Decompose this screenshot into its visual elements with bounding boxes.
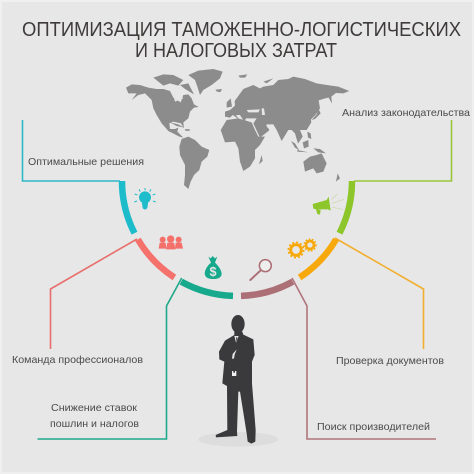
panel: manufacturer search (241, 260, 436, 439)
connector: coral (50, 239, 137, 349)
arc: mauve (241, 282, 293, 296)
panel: lower rates (38, 256, 233, 439)
icon: money bag (205, 256, 222, 279)
panel: team of professionals (12, 235, 183, 366)
icon: magnifier (250, 260, 271, 280)
connector: mauve (292, 278, 436, 439)
map: Russia and northern Asia (235, 77, 349, 120)
figure: businessman (198, 315, 278, 447)
icon: gears (288, 239, 316, 258)
title (22, 19, 461, 62)
world map (126, 69, 349, 189)
connector: orange (335, 238, 424, 349)
arc: coral (138, 239, 174, 278)
label: lower rates: пошлин и налогов (50, 418, 139, 430)
panel: optimal solutions (22, 120, 156, 233)
map: southern Asia (245, 112, 311, 144)
icon: team (159, 235, 183, 249)
arc: green (340, 181, 352, 233)
label: legislation analysis: Анализ законодательства (342, 107, 470, 119)
map: Eurasia, Africa and Oceania (215, 74, 349, 182)
icon: megaphone (313, 194, 344, 215)
title: И НАЛОГОВЫХ ЗАТРАТ (135, 40, 337, 62)
label: team of professionals: Команда профессионалов (12, 354, 143, 366)
map: Europe (225, 106, 257, 122)
arc: teal (181, 282, 233, 296)
icon: money bag: $ (209, 265, 217, 279)
connector: green (354, 120, 452, 181)
figure shadow (198, 432, 278, 447)
connector: teal (38, 278, 182, 439)
icon: light bulb (134, 188, 156, 210)
label: lower rates (50, 402, 139, 430)
figure silhouette (216, 315, 256, 444)
arc: orange (300, 239, 336, 278)
label: document check: Проверка документов (336, 355, 444, 367)
connector: cyan (22, 120, 120, 181)
label: manufacturer search: Поиск производителей (317, 421, 430, 433)
panel: legislation analysis (313, 107, 470, 233)
label: lower rates: Снижение ставок (51, 402, 137, 414)
panel: document check (288, 238, 444, 367)
map: Americas and Greenland (126, 69, 223, 189)
arc: cyan (122, 181, 134, 233)
label: optimal solutions: Оптимальные решения (28, 156, 144, 168)
